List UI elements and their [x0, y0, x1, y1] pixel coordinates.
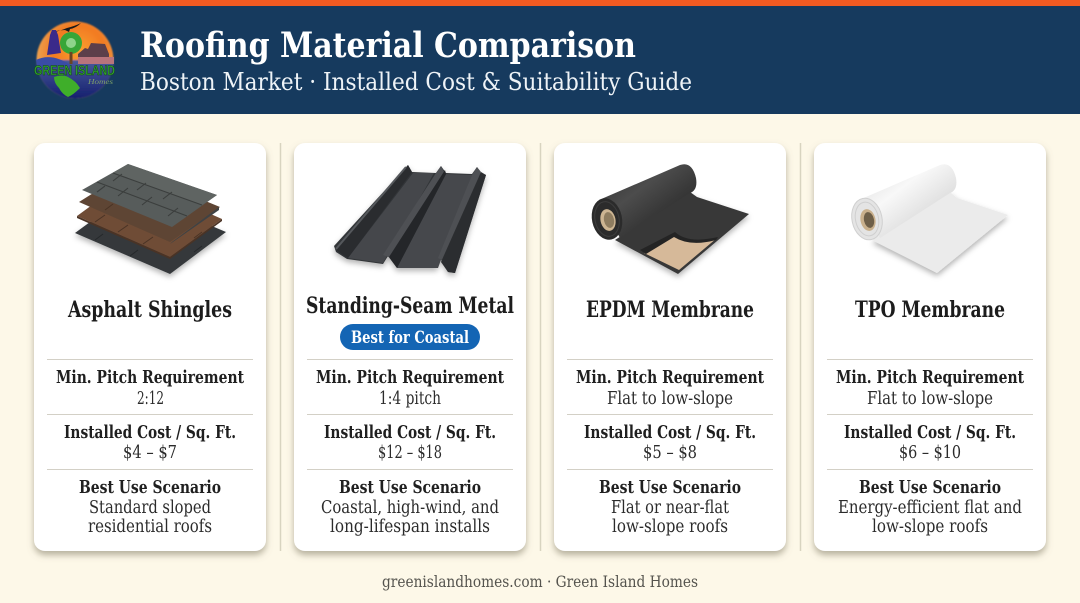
spec rows: Min. Pitch Requirement	[316, 367, 505, 388]
spec rows: Energy-efficient flat and	[838, 498, 1022, 518]
spec rows	[307, 360, 513, 537]
icon: black membrane roll	[588, 164, 749, 274]
spec rows: Min. Pitch Requirement	[836, 367, 1025, 388]
spec rows: $5 – $8	[643, 443, 697, 463]
spec rows: low-slope roofs	[612, 517, 728, 537]
spec rows: $12 – $18	[378, 443, 442, 463]
spec rows: residential roofs	[88, 517, 212, 537]
icon: metal panel	[334, 165, 486, 273]
spec rows: Coastal, high-wind, and	[321, 498, 499, 518]
icon: stacked shingles	[75, 164, 226, 274]
badge: best for coastal: Best for Coastal	[351, 328, 469, 348]
spec rows: Best Use Scenario	[79, 477, 221, 498]
title: Roofing Material Comparison	[140, 26, 636, 66]
spec rows: 1:4 pitch	[379, 389, 441, 409]
spec rows: Standard sloped	[89, 498, 211, 518]
footer: greenislandhomes.com · Green Island Homes	[382, 573, 698, 591]
spec rows: $6 – $10	[899, 443, 961, 463]
header banner	[0, 0, 1080, 114]
spec rows: Flat to low-slope	[867, 389, 993, 409]
panel: standing-seam metal	[294, 143, 526, 551]
spec rows: Installed Cost / Sq. Ft.	[64, 422, 236, 443]
spec rows: 2:12	[137, 389, 164, 409]
panel: EPDM membrane	[554, 143, 786, 551]
logo: Green Island Homes	[34, 22, 115, 98]
spec rows: low-slope roofs	[872, 517, 988, 537]
spec rows: Flat or near-flat	[611, 498, 729, 518]
logo: Green Island Homes: Homes	[87, 78, 113, 86]
icon: white membrane roll	[848, 164, 1008, 273]
logo: Green Island Homes: GREEN ISLAND	[34, 63, 115, 78]
spec rows: Installed Cost / Sq. Ft.	[584, 422, 756, 443]
card title: EPDM Membrane	[586, 297, 754, 323]
spec rows: Flat to low-slope	[607, 389, 733, 409]
spec rows	[567, 360, 773, 537]
spec rows: Installed Cost / Sq. Ft.	[324, 422, 496, 443]
card title: TPO Membrane	[855, 297, 1005, 323]
spec rows: $4 – $7	[123, 443, 177, 463]
spec rows	[827, 360, 1033, 537]
spec rows: Installed Cost / Sq. Ft.	[844, 422, 1016, 443]
spec rows: long-lifespan installs	[330, 517, 490, 537]
spec rows: Min. Pitch Requirement	[56, 367, 245, 388]
spec rows: Best Use Scenario	[339, 477, 481, 498]
panel: asphalt shingles	[34, 143, 266, 551]
spec rows: Min. Pitch Requirement	[576, 367, 765, 388]
panel: TPO membrane	[814, 143, 1046, 551]
card title: Asphalt Shingles	[67, 297, 232, 323]
spec rows: Best Use Scenario	[859, 477, 1001, 498]
spec rows	[47, 360, 253, 537]
subtitle: Boston Market · Installed Cost & Suitability Guide	[140, 68, 692, 96]
badge: best for coastal	[340, 324, 480, 350]
spec rows: Best Use Scenario	[599, 477, 741, 498]
card title: Standing-Seam Metal	[306, 293, 514, 319]
